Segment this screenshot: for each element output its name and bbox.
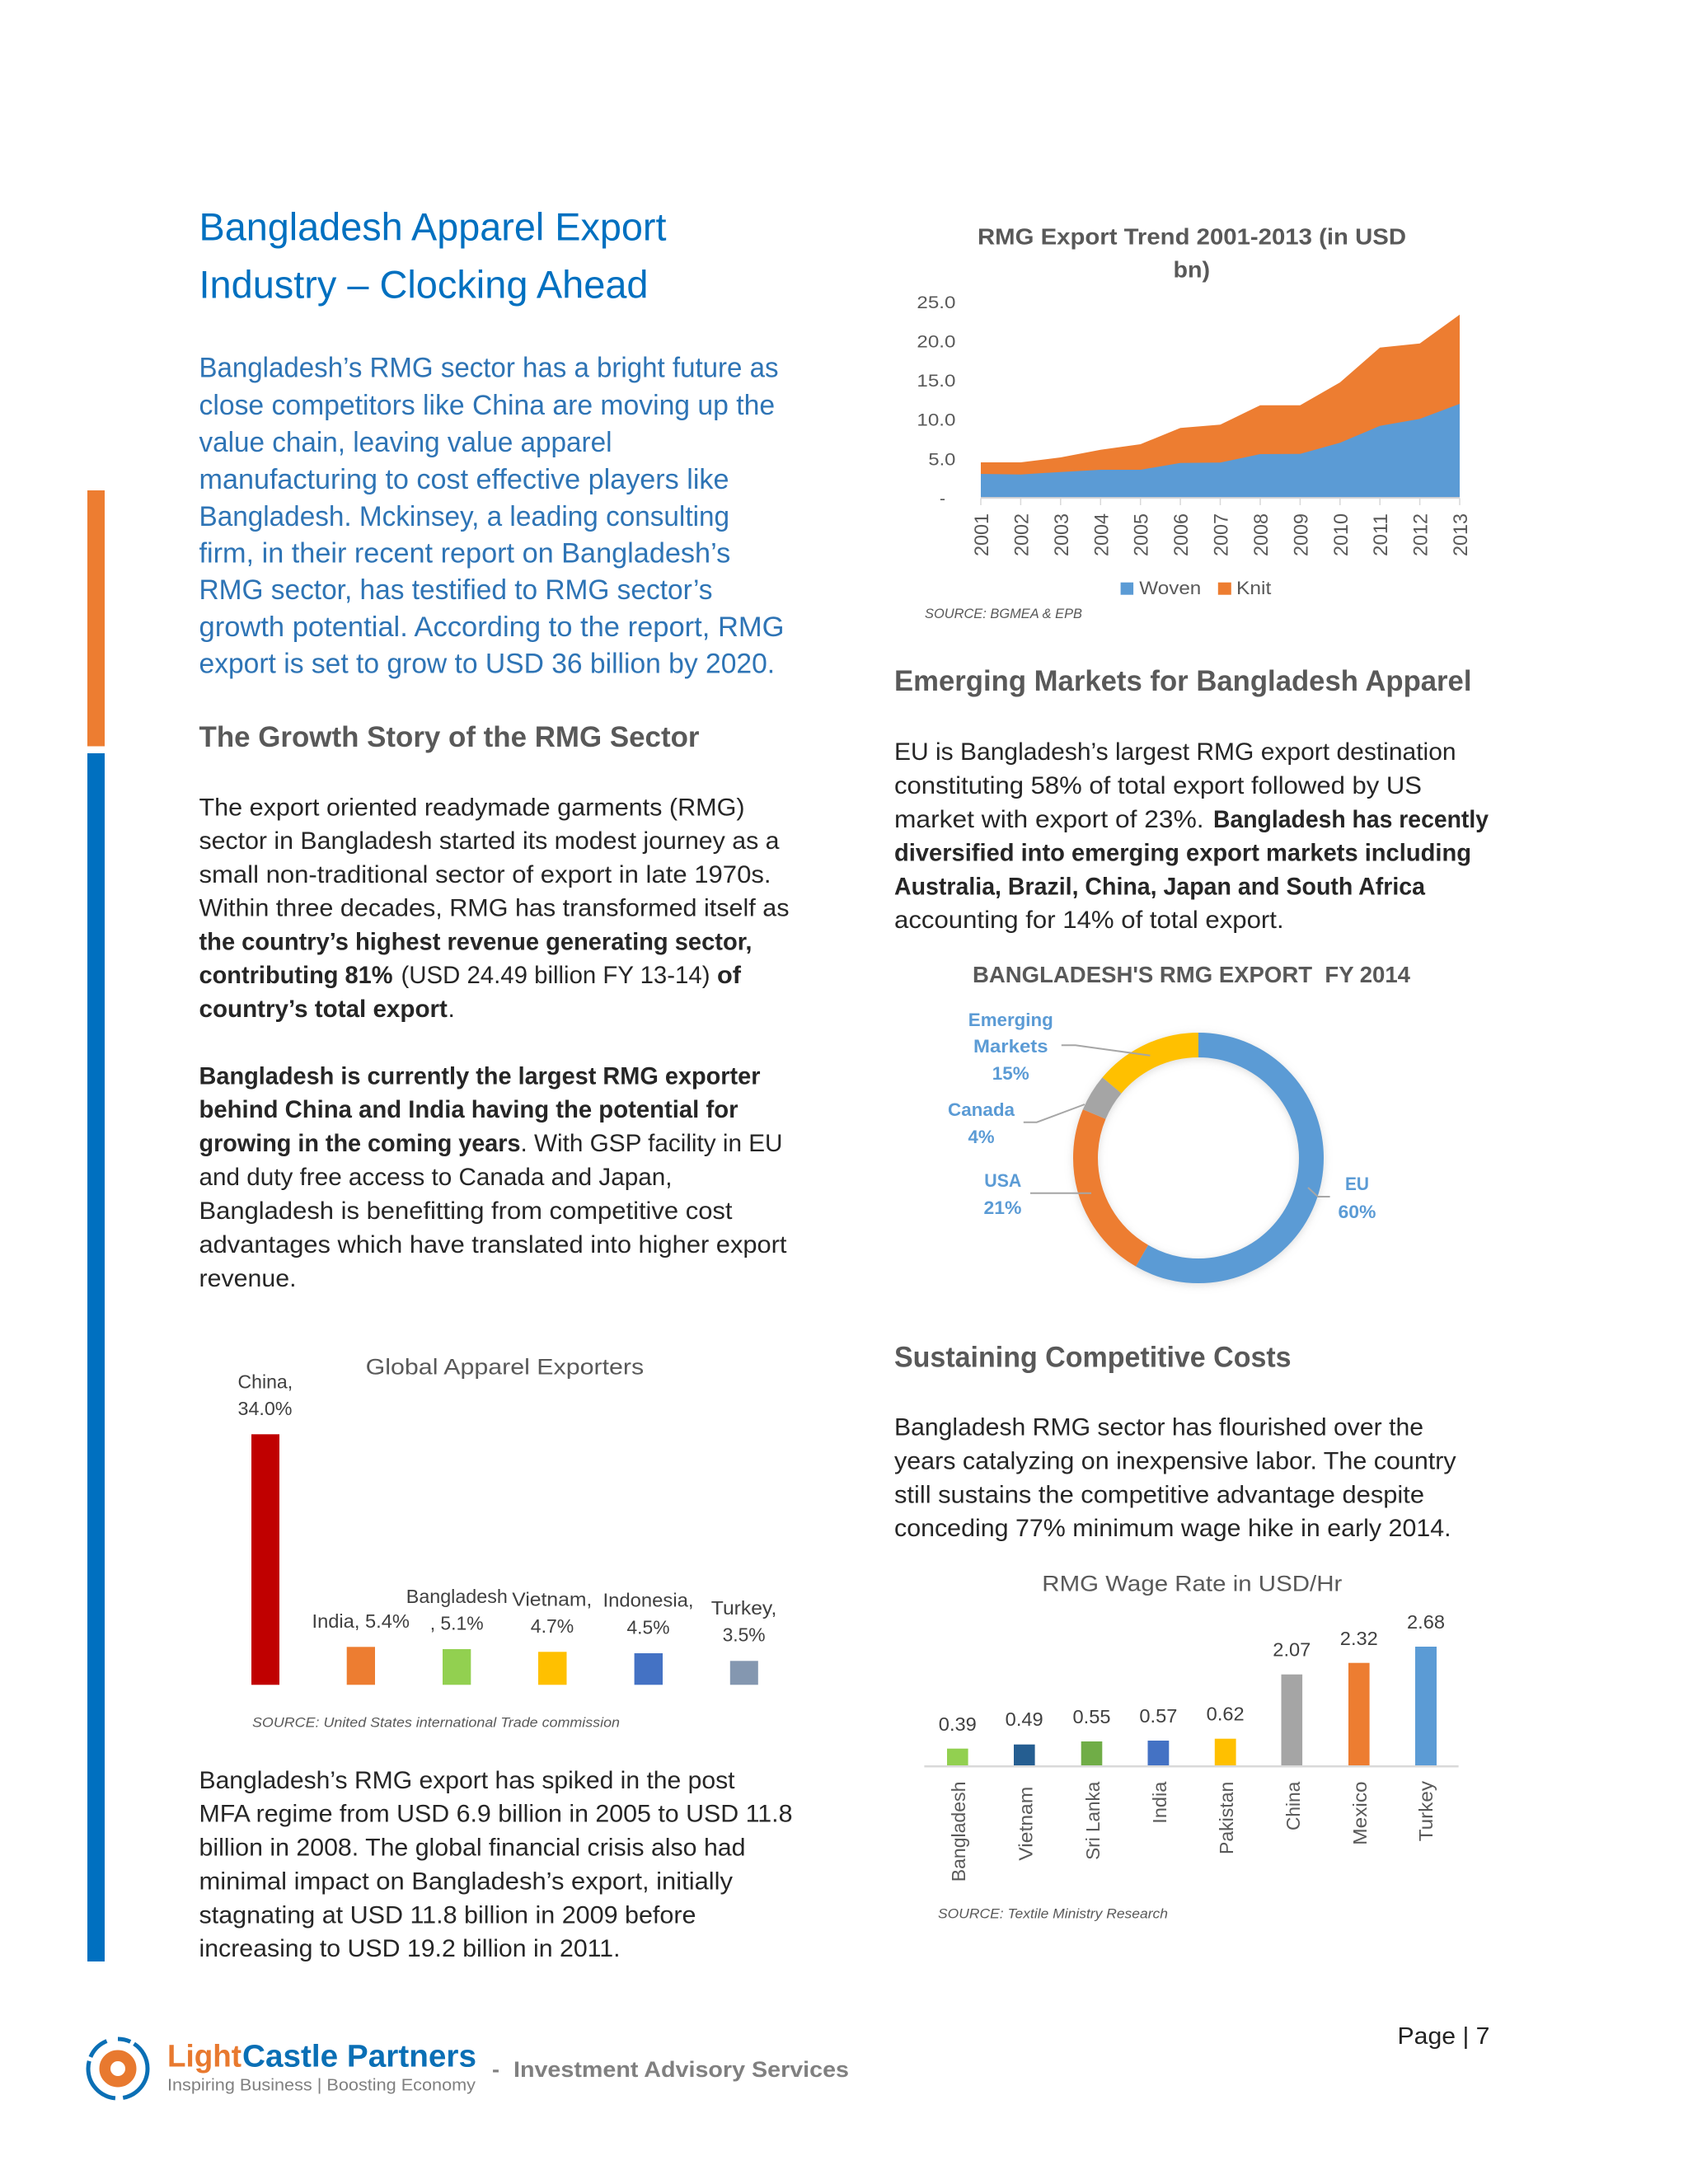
label: Canada: Canada <box>948 1099 1015 1120</box>
paragraph: largest exporter: advantages which have translated into higher export <box>199 1231 787 1258</box>
y axis labels: - <box>940 490 945 509</box>
paragraph: competitive costs: still sustains the competitive advantage despite <box>894 1481 1424 1508</box>
category labels: Mexico <box>1349 1781 1371 1845</box>
intro paragraph: close competitors like China are moving up the <box>199 390 775 421</box>
paragraph: largest exporter: and duty free access to Canada and Japan, <box>199 1164 673 1191</box>
label: EU: EU <box>1345 1174 1369 1194</box>
paragraph: largest exporter: Bangladesh is benefitting from competitive cost <box>199 1197 733 1225</box>
paragraph: largest exporter: Bangladesh is currently the largest RMG exporter <box>199 1062 761 1090</box>
bar: Bangladesh: , 5.1% <box>430 1613 484 1634</box>
paragraph: post MFA regime: minimal impact on Bangladesh’s export, initially <box>199 1868 733 1895</box>
value labels: 0.39 <box>939 1713 977 1735</box>
paragraph: emerging markets <box>894 738 1489 934</box>
brand name: Castle Partners <box>242 2039 476 2074</box>
footer service line: Investment Advisory Services <box>513 2057 849 2082</box>
title: Bangladesh Apparel Export <box>199 204 666 249</box>
paragraph: export oriented sector: The export oriented readymade garments (RMG) <box>199 794 745 821</box>
paragraph: largest exporter: behind China and India having the potential for <box>199 1096 738 1123</box>
bar: Bangladesh <box>406 1586 508 1685</box>
y axis labels: 15.0 <box>917 372 955 391</box>
category labels: India <box>1149 1781 1170 1824</box>
paragraph: largest exporter <box>199 1062 787 1292</box>
chart title <box>978 224 1406 283</box>
paragraph: emerging markets: accounting for 14% of total export. <box>894 907 1284 934</box>
paragraph: largest exporter: revenue. <box>199 1265 297 1292</box>
label: USA <box>984 1170 1022 1218</box>
paragraph: competitive costs: years catalyzing on inexpensive labor. The country <box>894 1447 1456 1474</box>
y axis labels: 10.0 <box>917 411 955 430</box>
area chart: RMG export trend <box>917 224 1472 621</box>
paragraph: emerging markets: Bangladesh has recently <box>1213 806 1489 833</box>
heading: growth story: The Growth Story of the RMG Sector <box>199 721 700 753</box>
paragraph: emerging markets: constituting 58% of total export followed by US <box>894 772 1422 799</box>
x axis year labels: 2009 <box>1290 513 1312 556</box>
paragraph: post MFA regime <box>199 1767 793 1962</box>
paragraph: competitive costs: conceding 77% minimum wage hike in early 2014. <box>894 1515 1451 1542</box>
brand name: Light <box>167 2039 241 2074</box>
y axis labels: 20.0 <box>917 333 955 352</box>
heading: emerging markets: Emerging Markets for Bangladesh Apparel <box>894 665 1472 697</box>
brand tagline: Inspiring Business | Boosting Economy <box>167 2077 476 2095</box>
x axis year labels: 2012 <box>1410 513 1432 556</box>
legend: Knit <box>1236 578 1271 598</box>
paragraph: post MFA regime: billion in 2008. The global financial crisis also had <box>199 1835 745 1862</box>
label: EU: 60% <box>1339 1202 1376 1222</box>
paragraph: export oriented sector: (USD 24.49 billion FY 13-14) <box>401 962 710 989</box>
x axis year labels <box>971 513 1472 556</box>
paragraph: export oriented sector <box>199 794 790 1023</box>
area: knit <box>981 315 1460 497</box>
paragraph: emerging markets: market with export of 23%. <box>894 806 1204 833</box>
value labels: 2.68 <box>1407 1611 1445 1633</box>
value labels: 0.55 <box>1073 1706 1111 1727</box>
intro paragraph: Bangladesh’s RMG sector has a bright future as <box>199 353 778 384</box>
paragraph: export oriented sector: Within three decades, RMG has transformed itself as <box>199 895 790 921</box>
label: Canada <box>948 1099 1015 1147</box>
bar: Turkey: 3.5% <box>723 1624 766 1646</box>
donut chart: RMG export FY 2014 <box>948 962 1410 1272</box>
source note: SOURCE: Textile Ministry Research <box>938 1905 1168 1921</box>
label: USA: USA <box>984 1170 1021 1191</box>
value labels: 0.49 <box>1006 1708 1043 1730</box>
bar: China: 34.0% <box>237 1398 292 1419</box>
paragraph: post MFA regime: MFA regime from USD 6.9 billion in 2005 to USD 11.8 <box>199 1801 793 1828</box>
x axis year labels: 2005 <box>1131 513 1153 556</box>
bar: India: India, 5.4% <box>312 1610 410 1632</box>
bar: Bangladesh: Bangladesh <box>406 1586 508 1607</box>
page number: Page | 7 <box>1398 2023 1490 2050</box>
paragraph: export oriented sector: . <box>448 996 455 1023</box>
paragraph: export oriented sector: of <box>717 962 742 989</box>
label: EU <box>1339 1174 1376 1222</box>
paragraph: competitive costs <box>894 1414 1456 1542</box>
intro paragraph: growth potential. According to the report, RMG <box>199 612 785 643</box>
paragraph: export oriented sector: small non-traditional sector of export in late 1970s. <box>199 861 771 888</box>
value labels <box>939 1611 1445 1735</box>
paragraph: emerging markets: diversified into emerging export markets including <box>894 839 1471 867</box>
category labels: Pakistan <box>1216 1782 1237 1854</box>
intro paragraph: RMG sector, has testified to RMG sector’s <box>199 574 712 606</box>
area: woven <box>981 404 1460 497</box>
bar: Indonesia: 4.5% <box>626 1616 669 1638</box>
chart title: Global Apparel Exporters <box>366 1355 644 1380</box>
paragraph: largest exporter: growing in the coming years <box>199 1130 521 1157</box>
legend <box>1121 578 1271 598</box>
category labels <box>948 1780 1437 1882</box>
bar chart: global apparel exporters <box>237 1355 776 1731</box>
intro paragraph: export is set to grow to USD 36 billion by 2020. <box>199 649 775 680</box>
x axis year labels: 2007 <box>1210 513 1233 556</box>
paragraph: export oriented sector: the country’s highest revenue generating sector, <box>199 928 752 956</box>
value labels: 0.57 <box>1139 1705 1177 1727</box>
bar: Vietnam: Vietnam, <box>512 1588 592 1610</box>
footer logo and tagline <box>88 2039 849 2098</box>
source note: SOURCE: BGMEA & EPB <box>925 606 1082 621</box>
paragraph: post MFA regime: increasing to USD 19.2 billion in 2011. <box>199 1935 620 1962</box>
paragraph: export oriented sector: sector in Bangladesh started its modest journey as a <box>199 827 780 855</box>
label: emerging markets <box>968 1010 1053 1084</box>
bars <box>947 1647 1437 1765</box>
heading: competitive costs: Sustaining Competitive Costs <box>894 1341 1292 1373</box>
bar: Indonesia: Indonesia, <box>603 1589 694 1610</box>
intro paragraph: value chain, leaving value apparel <box>199 427 612 458</box>
bar: Indonesia <box>603 1589 694 1685</box>
label: emerging markets: Markets <box>973 1036 1048 1057</box>
y axis labels: 5.0 <box>928 450 955 469</box>
paragraph: largest exporter: . With GSP facility in EU <box>521 1130 783 1157</box>
title <box>199 204 666 307</box>
label: USA: 21% <box>984 1197 1022 1218</box>
x axis year labels: 2006 <box>1170 513 1193 556</box>
bar chart: RMG wage rate <box>924 1572 1459 1921</box>
x axis year labels: 2008 <box>1250 513 1273 556</box>
source note: SOURCE: United States international Trade commission <box>252 1715 620 1731</box>
bar: China: China, <box>237 1371 293 1392</box>
blue side bar <box>87 753 105 1961</box>
y axis labels <box>917 293 955 509</box>
category labels: Sri Lanka <box>1082 1782 1104 1860</box>
category labels: Bangladesh <box>948 1782 969 1882</box>
bar: India <box>312 1610 410 1685</box>
intro paragraph <box>199 353 785 680</box>
bar: China <box>237 1371 293 1685</box>
paragraph: competitive costs: Bangladesh RMG sector has flourished over the <box>894 1414 1423 1441</box>
icon: LightCastle logo <box>88 2039 148 2098</box>
orange side bar <box>87 490 105 747</box>
label: emerging markets: 15% <box>992 1063 1029 1084</box>
donut slices <box>1085 1045 1311 1271</box>
category labels: China <box>1282 1782 1304 1830</box>
paragraph: export oriented sector: contributing 81% <box>199 962 392 989</box>
x axis year labels: 2013 <box>1450 513 1472 556</box>
bar: Vietnam: 4.7% <box>531 1615 574 1637</box>
paragraph: post MFA regime: Bangladesh’s RMG export has spiked in the post <box>199 1767 735 1794</box>
y axis labels: 25.0 <box>917 293 955 312</box>
bar: Vietnam <box>512 1588 592 1685</box>
bar: Turkey: Turkey, <box>711 1597 776 1619</box>
category labels: Vietnam <box>1015 1787 1037 1861</box>
footer service line: - <box>492 2057 499 2082</box>
x axis year labels: 2011 <box>1370 513 1392 556</box>
chart title: bn) <box>1174 257 1210 283</box>
x axis year labels: 2001 <box>971 513 993 556</box>
category labels: Turkey <box>1415 1780 1437 1841</box>
paragraph: emerging markets: Australia, Brazil, China, Japan and South Africa <box>894 874 1425 900</box>
intro paragraph: Bangladesh. Mckinsey, a leading consulting <box>199 501 729 532</box>
label: emerging markets: Emerging <box>968 1010 1053 1030</box>
value labels: 0.62 <box>1207 1704 1245 1725</box>
x axis year labels: 2003 <box>1051 513 1073 556</box>
label: Canada: 4% <box>968 1127 994 1147</box>
chart title: BANGLADESH'S RMG EXPORT FY 2014 <box>973 962 1410 987</box>
x axis year labels: 2002 <box>1010 513 1033 556</box>
value labels: 2.07 <box>1273 1638 1311 1660</box>
paragraph: export oriented sector: country’s total export <box>199 996 448 1023</box>
bar: Turkey <box>711 1597 776 1685</box>
chart title: RMG Wage Rate in USD/Hr <box>1042 1572 1342 1596</box>
x axis year labels: 2010 <box>1330 513 1353 556</box>
legend: Woven <box>1139 578 1201 598</box>
title: Industry – Clocking Ahead <box>199 262 648 307</box>
x axis year labels: 2004 <box>1090 513 1113 556</box>
intro paragraph: manufacturing to cost effective players like <box>199 464 729 495</box>
paragraph: post MFA regime: stagnating at USD 11.8 billion in 2009 before <box>199 1901 696 1929</box>
chart title: RMG Export Trend 2001-2013 (in USD <box>978 224 1406 250</box>
paragraph: emerging markets: EU is Bangladesh’s largest RMG export destination <box>894 738 1456 766</box>
intro paragraph: firm, in their recent report on Bangladesh’s <box>199 538 730 569</box>
value labels: 2.32 <box>1340 1628 1378 1649</box>
leader lines <box>1024 1045 1330 1197</box>
